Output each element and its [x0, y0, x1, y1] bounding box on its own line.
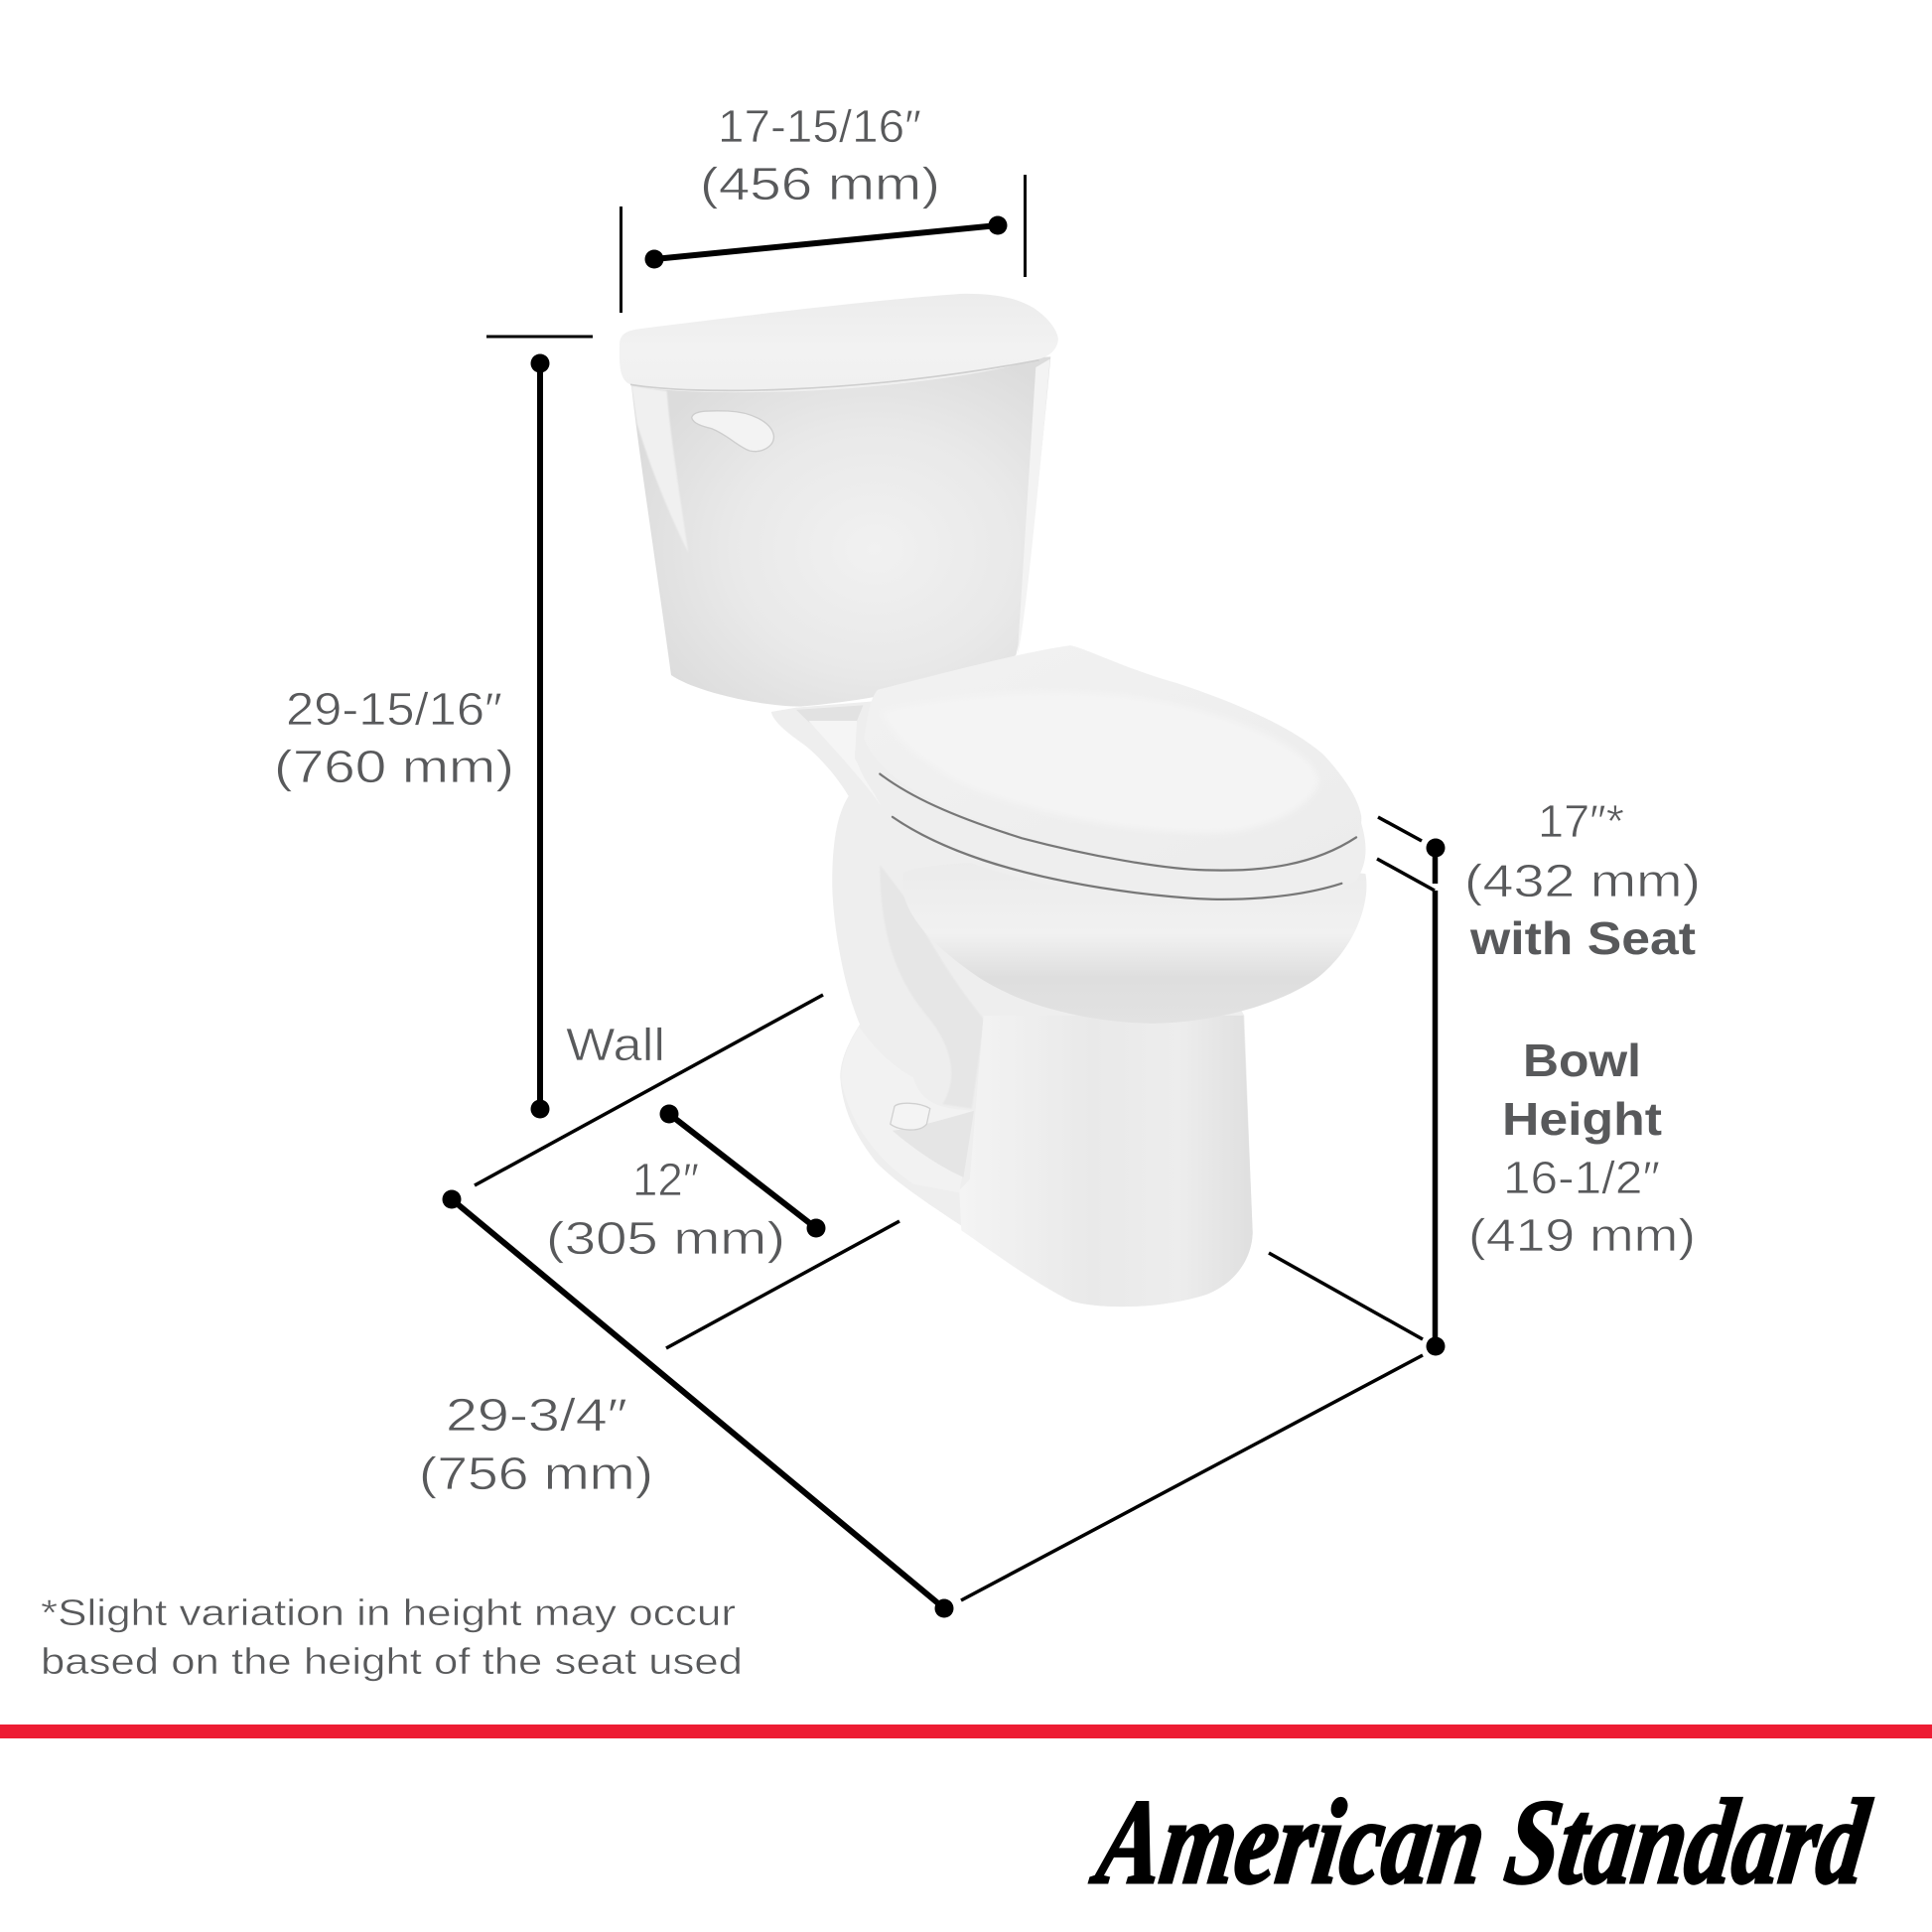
label: depth: 29-3/4″: [446, 1389, 627, 1441]
label: height with seat: with Seat: [1469, 912, 1696, 964]
rough-in dimension: [669, 1114, 816, 1228]
label: height with seat: 17″*: [1538, 795, 1624, 847]
overall height dimension: [537, 363, 543, 1109]
tank body: [631, 356, 1050, 707]
flush handle: [692, 411, 773, 452]
spout block: [796, 705, 863, 722]
tank body and lid: [620, 294, 1058, 707]
height top tick: [486, 336, 593, 338]
neck and trapway silhouette: [771, 701, 1253, 1307]
bowl height dimension: [1433, 891, 1438, 1346]
label: height with seat: [1464, 795, 1701, 964]
label: overall height: 29-15/16″: [286, 683, 502, 735]
toilet: [620, 294, 1366, 1307]
side floor line: [1269, 1253, 1423, 1339]
seat lid: [864, 645, 1361, 869]
label: tank width: [700, 100, 940, 209]
base foot: [841, 1027, 974, 1192]
wall line: [475, 995, 823, 1185]
label: wall: Wall: [566, 1019, 665, 1070]
base foot recess: [893, 1111, 974, 1177]
label: rough-in: 12″: [632, 1154, 699, 1205]
footnote: based on the height of the seat used: [41, 1641, 743, 1682]
seat shadow lines: [880, 774, 1356, 899]
label: depth: (756 mm): [419, 1448, 653, 1499]
toilet bowl and base: [771, 645, 1366, 1307]
label: bowl height: [1468, 1035, 1696, 1261]
label: bowl height: Bowl: [1523, 1035, 1641, 1086]
label: overall height: (760 mm): [274, 741, 514, 792]
label: height with seat: (432 mm): [1464, 855, 1701, 906]
lid recess: [880, 692, 1319, 833]
footnote: *Slight variation in height may occur: [41, 1592, 736, 1633]
bowl: [902, 861, 1366, 1024]
dimension lines: [452, 175, 1436, 1608]
depth dimension: [452, 1199, 944, 1608]
tank width dimension: [654, 225, 998, 259]
footnote: [41, 1592, 743, 1682]
label: bowl height: Height: [1502, 1093, 1662, 1145]
neck highlight: [809, 721, 884, 811]
tank width tick left: [620, 207, 622, 313]
lid underside line: [630, 360, 1039, 390]
seat segment: [1433, 848, 1438, 884]
trapway recess: [880, 865, 984, 1109]
label: rough-in: (305 mm): [546, 1212, 785, 1264]
dimension end dots: [443, 216, 1446, 1618]
front floor line: [961, 1355, 1423, 1600]
seat top tick: [1378, 817, 1422, 841]
tank right edge highlight: [1018, 359, 1050, 653]
label: bowl height: 16-1/2″: [1503, 1152, 1660, 1203]
label: depth: [419, 1389, 653, 1499]
label: tank width: 17-15/16″: [718, 100, 921, 152]
rough-in end line: [666, 1221, 899, 1348]
red divider bar: [0, 1725, 1932, 1738]
seat ring: [855, 714, 1365, 903]
pedestal: [959, 1016, 1253, 1307]
floor bolt cap: [891, 1103, 930, 1130]
label: overall height: [274, 683, 514, 792]
tank lid: [620, 294, 1058, 392]
bowl top tick: [1377, 859, 1435, 891]
label: bowl height: (419 mm): [1468, 1209, 1696, 1261]
label: tank width: (456 mm): [700, 158, 940, 209]
tank left facet: [631, 385, 688, 553]
tank width tick right: [1024, 175, 1027, 277]
label: rough-in: [546, 1154, 785, 1264]
